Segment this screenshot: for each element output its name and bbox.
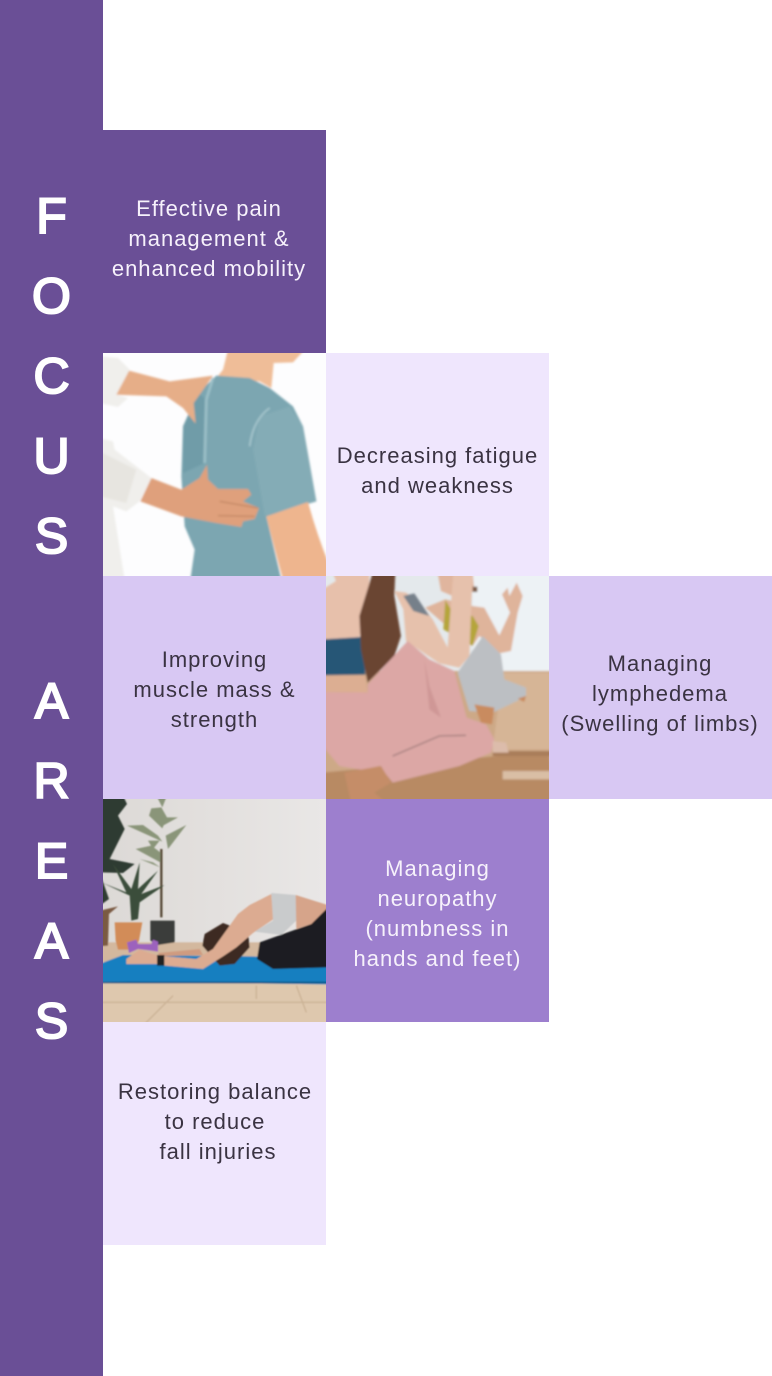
panel: improving muscle mass [103, 576, 326, 799]
title letter U: U [33, 428, 70, 484]
title letter A: A [35, 673, 68, 729]
panel: managing neuropathy: neuropathy [377, 886, 498, 911]
panel: managing neuropathy [326, 799, 549, 1022]
title letter O: O [32, 268, 71, 324]
panel: effective pain management: enhanced mobility [112, 256, 306, 281]
panel: restoring balance: to reduce [165, 1109, 265, 1134]
panel: restoring balance: fall injuries [160, 1139, 276, 1164]
title letter S: S [35, 508, 68, 564]
panel: managing lymphedema: (Swelling of limbs) [561, 711, 759, 736]
panel: effective pain management [103, 130, 326, 353]
title letter E: E [35, 833, 68, 889]
panel: decreasing fatigue: and weakness [361, 473, 514, 498]
title letter C: C [33, 348, 70, 404]
panel: managing lymphedema: lymphedema [592, 681, 728, 706]
title letter F: F [36, 188, 67, 244]
panel: restoring balance: Restoring balance [118, 1079, 312, 1104]
sidebar: vertical title band [0, 0, 103, 1376]
panel: managing neuropathy: hands and feet) [354, 946, 521, 971]
photo: woman in child's pose on a blue mat [103, 799, 326, 1022]
panel: effective pain management: management & [128, 226, 290, 251]
panel: managing lymphedema [549, 576, 772, 799]
panel: managing lymphedema: Managing [608, 651, 712, 676]
photo: physiotherapist examining a patient's back [103, 353, 326, 576]
title letter A: A [35, 913, 68, 969]
panel: decreasing fatigue [326, 353, 549, 576]
title letter S: S [35, 993, 68, 1049]
panel: effective pain management: Effective pain [136, 196, 282, 221]
panel: decreasing fatigue: Decreasing fatigue [337, 443, 538, 468]
panel: improving muscle mass: strength [171, 707, 258, 732]
panel: managing neuropathy: (numbness in [365, 916, 510, 941]
title letter R: R [33, 753, 70, 809]
panel: restoring balance [103, 1022, 326, 1245]
panel: improving muscle mass: muscle mass & [133, 677, 296, 702]
panel: managing neuropathy: Managing [385, 856, 490, 881]
photo: two women in a seated yoga twist [326, 576, 549, 799]
panel: improving muscle mass: Improving [162, 647, 267, 672]
